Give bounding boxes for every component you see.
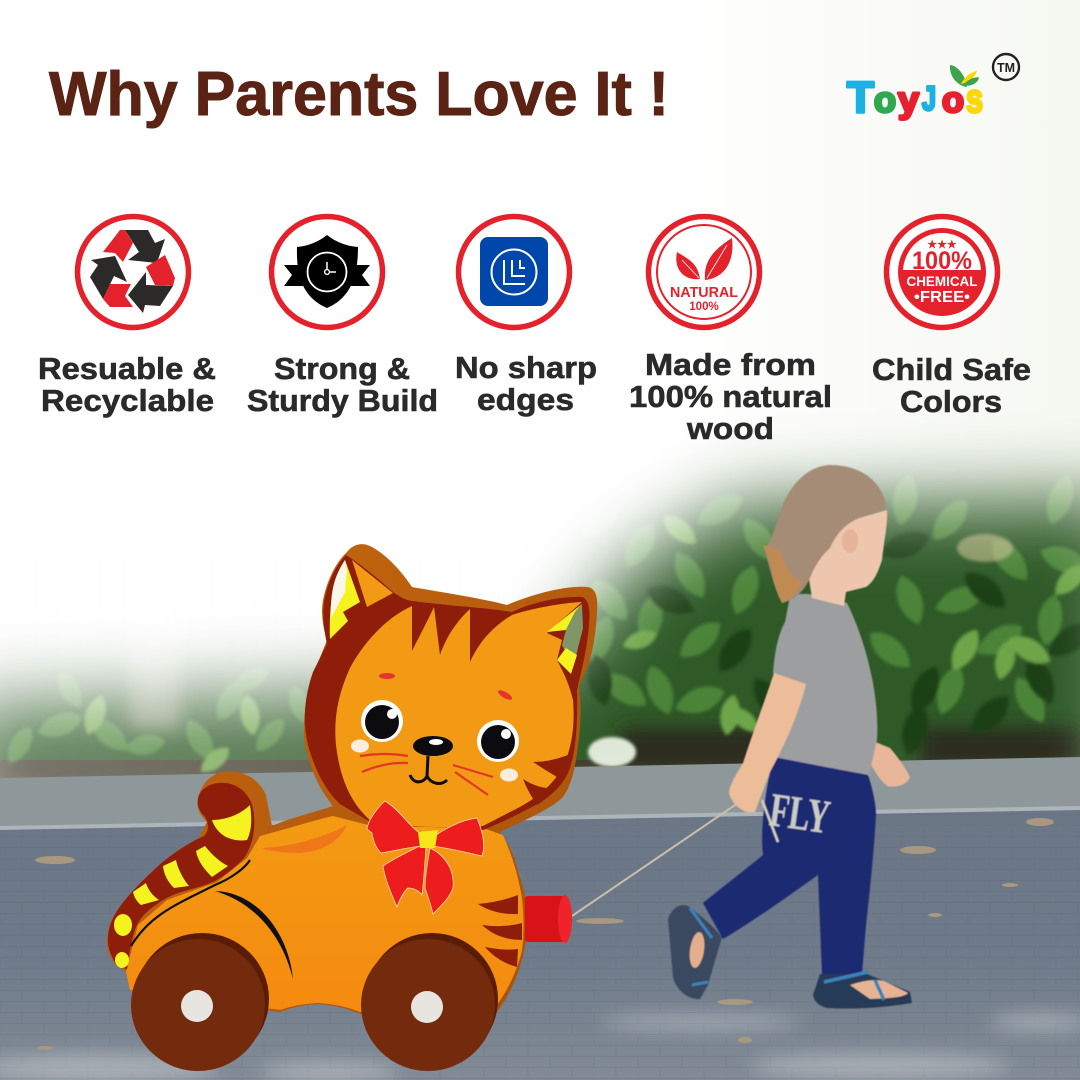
wood edge silhouette <box>107 544 597 1014</box>
head face <box>335 602 582 827</box>
label: edges <box>477 382 574 417</box>
nose and mouth <box>410 736 453 783</box>
head fur <box>305 555 589 830</box>
label <box>455 350 597 417</box>
body markings <box>131 825 522 979</box>
icon: chemical free: •FREE• <box>914 289 970 306</box>
logo letters: y <box>898 79 919 120</box>
title: Why Parents Love It ! <box>49 60 669 129</box>
curls at nape <box>763 545 802 603</box>
icon: chemical free: ★★★ <box>927 239 957 251</box>
ear <box>842 529 858 553</box>
icon: natural 100 percent: 100% <box>689 301 719 313</box>
label <box>872 352 1031 419</box>
feature: strong and sturdy <box>247 216 438 418</box>
label: Made from <box>645 347 816 382</box>
walking toddler <box>668 465 912 1008</box>
icon: natural 100 percent <box>648 216 760 328</box>
body base <box>126 816 524 1012</box>
red bow <box>367 801 484 914</box>
label <box>38 351 216 418</box>
label <box>629 347 832 446</box>
logo letters: T <box>847 73 874 122</box>
feature: child safe colors <box>872 216 1031 419</box>
feature: natural wood <box>629 216 832 446</box>
left ear <box>330 560 393 639</box>
front foot sandal <box>813 972 912 1008</box>
logo letters: o <box>874 79 896 120</box>
foliage backdrop <box>0 438 1080 778</box>
toy: wooden cat pull-along <box>107 544 597 1071</box>
trouser print: FLY <box>766 783 833 844</box>
red axle cap <box>525 895 572 943</box>
trademark badge: TM <box>997 61 1015 75</box>
label: Recyclable <box>41 383 214 418</box>
logo letters <box>847 73 983 122</box>
pull string <box>572 803 738 916</box>
face and neck <box>806 510 887 606</box>
curb <box>0 757 1080 830</box>
label: No sharp <box>455 350 597 385</box>
label: Resuable & <box>38 351 216 386</box>
drawstring <box>762 800 778 842</box>
feature: no sharp edges <box>455 216 597 417</box>
icon: chemical free: 100% <box>912 247 972 275</box>
feature: reusable and recyclable <box>38 216 216 418</box>
logo letters: s <box>966 77 983 121</box>
label: Child Safe <box>872 352 1031 387</box>
tail <box>108 783 254 969</box>
far arm <box>869 741 910 787</box>
eyes <box>361 700 519 762</box>
logo letters: o <box>942 79 964 120</box>
brows and cheeks <box>351 673 518 782</box>
trousers <box>703 755 876 977</box>
trademark badge <box>993 54 1019 80</box>
pavement <box>0 810 1080 1080</box>
logo: Toyjos <box>847 54 1019 122</box>
right wheel <box>361 933 498 1071</box>
hair <box>763 465 887 603</box>
icon: chemical free <box>886 216 998 328</box>
label: Sturdy Build <box>247 383 438 418</box>
icon: blue rounded corner badge <box>458 216 570 328</box>
icon: shield with clock <box>272 216 382 328</box>
left wheel <box>131 933 269 1071</box>
logo letters: J <box>922 80 936 118</box>
icon: chemical free: CHEMICAL <box>906 274 978 289</box>
shirt <box>773 594 877 775</box>
whiskers <box>360 754 493 795</box>
logo leaves <box>950 65 979 87</box>
near arm and hand <box>729 673 806 813</box>
label: wood <box>686 411 774 446</box>
cheek stripes <box>523 755 568 805</box>
back foot sandal <box>668 905 722 999</box>
right ear <box>547 604 583 674</box>
label: Colors <box>900 384 1002 419</box>
icon: recycle <box>78 216 188 328</box>
icon: natural 100 percent: NATURAL <box>670 285 738 301</box>
label: 100% natural <box>629 379 832 414</box>
label <box>247 351 438 418</box>
label: Strong & <box>274 351 410 386</box>
